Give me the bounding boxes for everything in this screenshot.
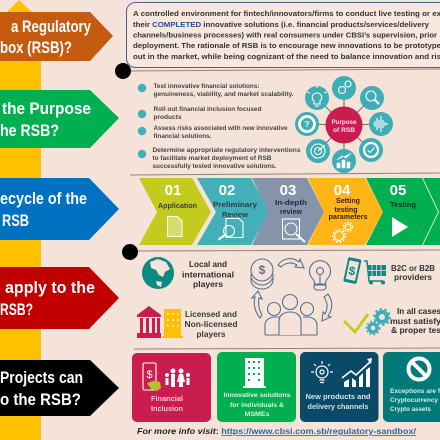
question arrow: purpose of the RSB bbox=[0, 90, 119, 148]
question arrow: what projects can apply bbox=[0, 360, 119, 416]
panel: purpose bullet list bbox=[138, 83, 301, 170]
question arrow: what is a regulatory sandbox: box (RSB)? bbox=[0, 39, 72, 57]
text: fit and proper test requirement: In all cases bbox=[397, 307, 440, 316]
card: financial inclusion bbox=[132, 353, 211, 422]
card: financial inclusion: Inclusion bbox=[151, 404, 183, 413]
panel: purpose bullet list: to facilitate market deployment of RSB bbox=[152, 155, 272, 162]
panel: purpose bullet list: financial solutions. bbox=[154, 133, 212, 140]
card: new products and delivery channels: New products and bbox=[306, 392, 370, 401]
panel: purpose bullet list: Roll out financial inclusion focused bbox=[154, 106, 262, 113]
chart: purpose of RSB hub diagram: Purpose bbox=[332, 119, 357, 126]
panel: definition text box bbox=[126, 2, 440, 68]
card: new products and delivery channels bbox=[300, 352, 378, 422]
step 02 preliminary review: Review bbox=[222, 210, 248, 219]
icon: bank and office building bbox=[137, 306, 183, 338]
icon: money idea people cycle: $ bbox=[259, 263, 266, 277]
question arrow: lifecycle of the RSB: ecycle of the bbox=[0, 190, 87, 208]
text: B2C or B2B providers: providers bbox=[394, 273, 433, 282]
panel: purpose bullet list: products bbox=[154, 114, 182, 121]
icon: globe bbox=[142, 257, 174, 289]
text: licensed and non-licensed players: Licensed and bbox=[185, 310, 237, 319]
panel: purpose bullet list: genuineness, viability, and market scalability. bbox=[154, 91, 294, 98]
panel: purpose bullet list: Test innovative financial solutions: bbox=[154, 83, 260, 90]
step 06 partially visible bbox=[423, 178, 440, 245]
step 03 in-depth review: 03 bbox=[280, 182, 296, 199]
card: exceptions: Exceptions are f bbox=[390, 388, 440, 395]
card: innovative solutions for individuals and MSMEs: for individuals & bbox=[230, 402, 284, 409]
question arrow: who can apply to the RSB: apply to the bbox=[5, 279, 95, 297]
card: innovative solutions for individuals and MSMEs bbox=[217, 352, 296, 422]
text: B2C or B2B providers bbox=[391, 264, 435, 282]
panel: definition text box: out in the market, while being cognizant of the need to balance innovation and ris bbox=[133, 52, 440, 61]
question arrow: what is a regulatory sandbox bbox=[0, 12, 113, 61]
icon: phone and shopping cart bbox=[343, 257, 386, 284]
step 05 testing: Testing bbox=[390, 200, 416, 209]
text: local and international players: Local and bbox=[189, 260, 227, 269]
timeline marker dot 2 bbox=[122, 244, 138, 260]
text: licensed and non-licensed players: Non-licensed bbox=[184, 320, 238, 329]
chart: purpose of RSB hub diagram: ? bbox=[305, 120, 310, 129]
question arrow: purpose of the RSB: the Purpose bbox=[2, 100, 91, 118]
yellow timeline bar bbox=[0, 0, 41, 440]
question arrow: lifecycle of the RSB bbox=[0, 178, 119, 240]
step 04 setting testing parameters: 04 bbox=[334, 182, 351, 199]
chart: purpose of RSB hub diagram: of RSB bbox=[333, 127, 355, 134]
card: exceptions: Cryptocurrency bbox=[390, 397, 438, 404]
card: innovative solutions for individuals and MSMEs: Innovative solutions bbox=[224, 392, 291, 399]
text: fit and proper test requirement bbox=[390, 307, 440, 335]
card: exceptions bbox=[383, 352, 440, 422]
panel: purpose bullet list: Determine appropriate regulatory interventions bbox=[152, 147, 301, 154]
text: fit and proper test requirement: must satisfy bbox=[390, 317, 440, 326]
question arrow: purpose of the RSB: he RSB? bbox=[0, 122, 59, 140]
card: new products and delivery channels: delivery channels bbox=[308, 402, 368, 411]
step 04 setting testing parameters: testing bbox=[334, 207, 358, 214]
text: local and international players: players bbox=[193, 280, 224, 289]
step 03 in-depth review: review bbox=[280, 207, 302, 216]
panel: definition text box: their COMPLETED innovative solutions (i.e. financial products/services/delivery bbox=[133, 20, 430, 29]
question arrow: what projects can apply: Projects can bbox=[0, 369, 83, 387]
card: exceptions: Crypto assets bbox=[390, 406, 431, 413]
question arrow: who can apply to the RSB bbox=[0, 267, 119, 329]
panel: definition text box: deployment. The rationale of RSB is to encourage new innovations to be prototype bbox=[133, 41, 440, 50]
question arrow: what projects can apply: o the RSB? bbox=[0, 391, 81, 409]
process: RSB lifecycle chevrons bbox=[139, 178, 440, 245]
text: local and international players: international bbox=[182, 270, 234, 280]
text: fit and proper test requirement: & proper tes bbox=[391, 326, 440, 335]
step 04 setting testing parameters bbox=[308, 178, 383, 245]
step 05 testing bbox=[366, 178, 438, 245]
footer: more info link: For more info visit : https://www.cbsi.com.sb/regulatory-sandbox/ bbox=[137, 426, 417, 436]
panel: definition text box: channels/business processes) with real consumers under CBSI’s supervision, prior bbox=[133, 30, 437, 40]
step 03 in-depth review bbox=[252, 178, 324, 245]
icon: money idea people cycle bbox=[251, 259, 332, 335]
timeline marker dot 1 bbox=[115, 63, 131, 79]
icon: check mark and gears bbox=[344, 309, 390, 335]
step 05 testing: 05 bbox=[390, 182, 406, 199]
step 02 preliminary review bbox=[197, 178, 269, 245]
text: licensed and non-licensed players bbox=[184, 310, 238, 339]
step 03 in-depth review: In-depth bbox=[275, 198, 307, 207]
card: financial inclusion: $ bbox=[146, 369, 153, 381]
question arrow: what is a regulatory sandbox: a Regulatory bbox=[11, 18, 92, 36]
step 01 application: 01 bbox=[165, 182, 181, 199]
text: B2C or B2B providers: B2C or B2B bbox=[391, 264, 435, 273]
text: local and international players bbox=[182, 260, 234, 289]
step 02 preliminary review: Preliminary bbox=[213, 200, 258, 209]
card: financial inclusion: Financial bbox=[151, 394, 183, 403]
panel: definition text box: A controlled environment for fintech/innovators/firms to conduct live testing or ex bbox=[133, 9, 440, 18]
card: innovative solutions for individuals and MSMEs: MSMEs bbox=[244, 411, 270, 418]
text: licensed and non-licensed players: players bbox=[196, 330, 226, 339]
panel: purpose bullet list: Assess risks associated with new innovative bbox=[154, 125, 288, 132]
step 02 preliminary review: 02 bbox=[219, 182, 235, 199]
step 04 setting testing parameters: Setting bbox=[336, 198, 360, 205]
panel: purpose bullet list: successfully tested innovative solutions. bbox=[152, 163, 277, 170]
step 04 setting testing parameters: parameters bbox=[328, 214, 368, 221]
chart: purpose of RSB hub diagram bbox=[295, 76, 393, 173]
step 01 application bbox=[139, 178, 211, 245]
step 01 application: Application bbox=[158, 201, 197, 210]
question arrow: who can apply to the RSB: RSB? bbox=[0, 301, 33, 319]
question arrow: lifecycle of the RSB: RSB bbox=[2, 212, 29, 230]
icon: phone and shopping cart: $ bbox=[347, 263, 357, 279]
